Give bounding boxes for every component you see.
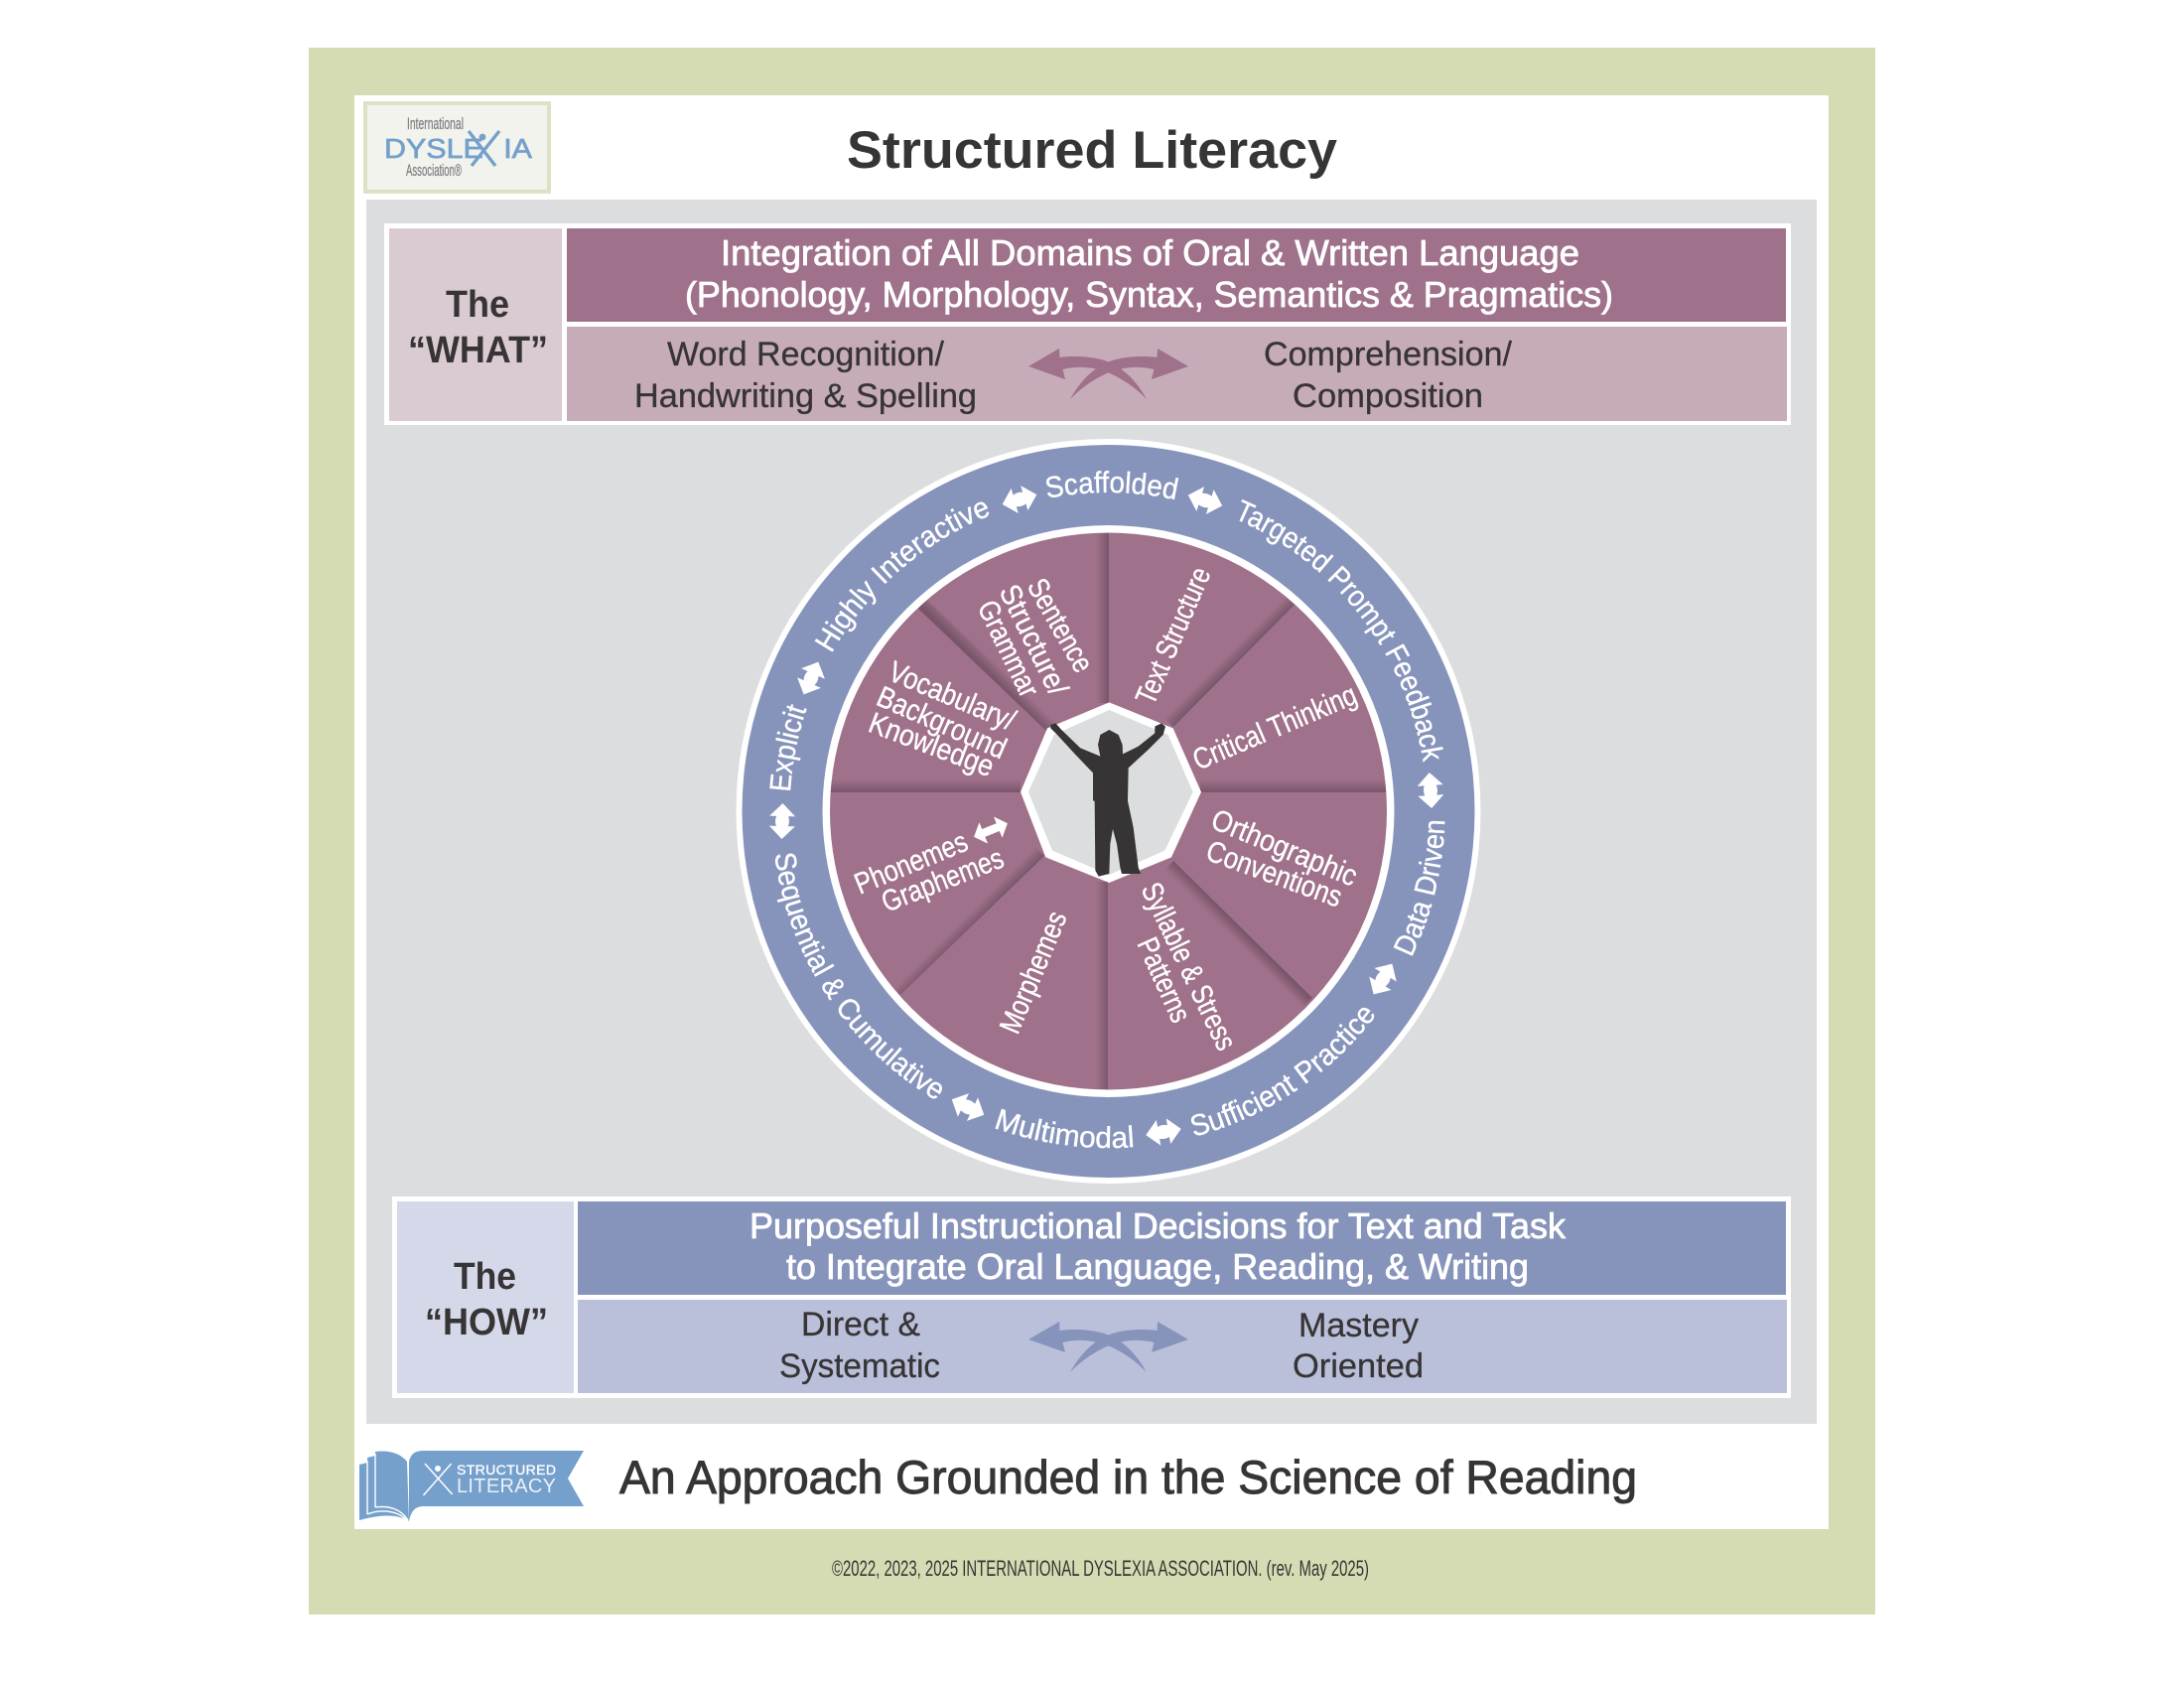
HOW heading band: to Integrate Oral Language, Reading, & Writing: [786, 1246, 1529, 1287]
logo: International Dyslexia Association: International: [407, 114, 464, 133]
segment: Phonemes to Graphemes: Phonemes: [850, 825, 973, 901]
logo: International Dyslexia Association: Association®: [406, 161, 462, 180]
green frame: [309, 48, 1875, 1615]
panel: the WHAT: [384, 223, 1791, 425]
HOW sub band: [578, 1300, 1787, 1393]
HOW label cell: “HOW”: [425, 1302, 548, 1343]
WHAT heading band: Integration of All Domains of Oral & Written Language: [721, 232, 1579, 273]
ring label: Multimodal: Multimodal: [995, 1108, 1134, 1148]
HOW sub band: Systematic: [779, 1347, 940, 1385]
ring label: Data Driven: Data Driven: [1394, 820, 1445, 956]
HOW heading band: Purposeful Instructional Decisions for Text and Task: [750, 1205, 1567, 1246]
logo: Structured Literacy book banner: STRUCTURED: [457, 1462, 556, 1477]
outer ring: [737, 439, 1481, 1184]
segment: Syllable & Stress Patterns: [1131, 878, 1243, 1055]
WHAT label cell: “WHAT”: [408, 330, 548, 371]
segment: Text Structure: Text Structure: [1130, 562, 1218, 709]
arrow: WHAT crossing arrows: [1028, 349, 1188, 399]
HOW label cell: [397, 1201, 574, 1393]
WHAT sub band: Word Recognition/: [667, 336, 945, 373]
segment: Vocabulary / Background Knowledge: Vocabulary/: [884, 655, 1021, 738]
segment: Sentence Structure / Grammar: Grammar: [971, 596, 1045, 703]
segment: Phonemes to Graphemes: Graphemes: [878, 842, 1009, 919]
white inner panel: [354, 95, 1829, 1529]
segment: Morphemes: Morphemes: [994, 907, 1074, 1039]
segment: Critical Thinking: Critical Thinking: [1188, 678, 1362, 776]
ring label: Sequential & Cumulative: Sequential & Cumulative: [774, 854, 942, 1098]
segment: Syllable & Stress Patterns: Syllable & Stress: [1135, 878, 1243, 1055]
WHAT sub band: [567, 327, 1787, 421]
ring label: Highly Interactive: Highly Interactive: [814, 502, 989, 651]
ring label: Sufficient Practice: Sufficient Practice: [1191, 1007, 1374, 1136]
ring label: Explicit: Explicit: [769, 704, 806, 790]
panel: the HOW: [392, 1196, 1791, 1398]
segment: Orthographic Conventions: Conventions: [1202, 835, 1346, 914]
WHAT heading band: [567, 228, 1786, 322]
title: Structured Literacy: [847, 121, 1338, 180]
HOW sub band: Mastery: [1298, 1307, 1419, 1344]
grey content panel: [366, 200, 1817, 1424]
disc dividers: [830, 533, 1387, 1089]
copyright: ©2022, 2023, 2025 INTERNATIONAL DYSLEXIA ASSOCIATION. (rev. May 2025): [832, 1556, 1369, 1581]
segment: Sentence Structure / Grammar: Structure/: [993, 580, 1074, 701]
HOW label cell: The: [454, 1256, 516, 1298]
inner disc: [830, 532, 1387, 1090]
WHAT sub band: Composition: [1293, 377, 1483, 415]
ring label: Scaffolded: Scaffolded: [1046, 471, 1179, 500]
tagline: An Approach Grounded in the Science of Reading: [619, 1451, 1637, 1503]
ring labels: [769, 471, 1445, 1148]
segment: Vocabulary / Background Knowledge: Background: [872, 680, 1012, 766]
segment: Sentence Structure / Grammar: [971, 573, 1099, 703]
logo: International Dyslexia Association: DYSLE XIA: [384, 133, 532, 164]
centre octagon: [1021, 702, 1201, 883]
WHAT label cell: The: [446, 284, 509, 326]
arrow: HOW crossing arrows: [1028, 1322, 1188, 1372]
ring label: Targeted Prompt Feedback: Targeted Prompt Feedback: [1239, 498, 1443, 763]
WHAT label cell: [389, 228, 562, 421]
WHAT sub band: Comprehension/: [1264, 336, 1513, 373]
segment: Syllable & Stress Patterns: Patterns: [1131, 932, 1197, 1028]
icon: child silhouette with raised arms: [1050, 723, 1165, 877]
segment: Vocabulary / Background Knowledge: [865, 655, 1021, 783]
logo: International Dyslexia Association: [365, 103, 549, 192]
WHAT sub band: Handwriting & Spelling: [634, 377, 977, 415]
segment: Sentence Structure / Grammar: Sentence: [1021, 573, 1099, 678]
segment: Orthographic Conventions: Orthographic: [1206, 803, 1362, 893]
logo: Structured Literacy book banner: LITERACY: [457, 1476, 556, 1497]
segment: Vocabulary / Background Knowledge: Knowledge: [865, 707, 999, 783]
wheel: [737, 439, 1481, 1184]
ring double arrows: [768, 483, 1444, 1148]
HOW sub band: Direct &: [801, 1306, 920, 1343]
HOW sub band: Oriented: [1293, 1347, 1424, 1385]
disc segment labels: [850, 562, 1362, 1055]
WHAT heading band: (Phonology, Morphology, Syntax, Semantics & Pragmatics): [685, 274, 1613, 315]
HOW heading band: [578, 1201, 1786, 1295]
logo: Structured Literacy book banner: [359, 1451, 584, 1521]
